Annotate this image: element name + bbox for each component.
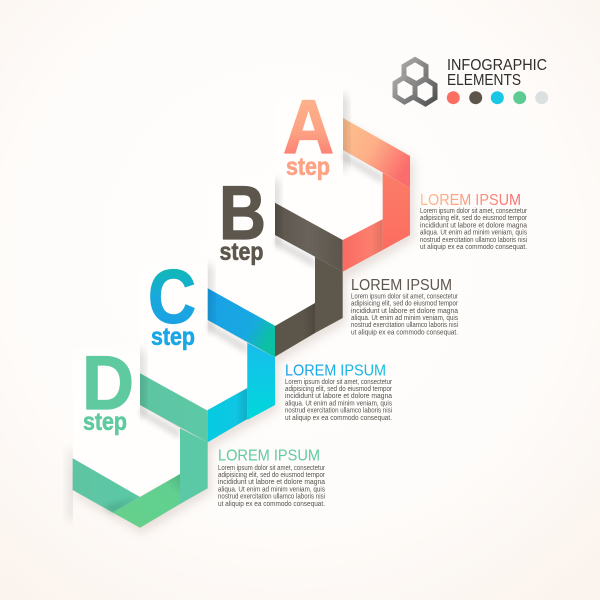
text block A: aliqua. Ut enim ad minim veniam, quis [420, 230, 527, 237]
text block B: incididunt ut labore et dolore magna [351, 308, 458, 315]
letter C with step label: step [151, 323, 195, 351]
text block A [420, 192, 528, 251]
panel: step C [140, 255, 247, 410]
title [447, 57, 547, 89]
band: A right [383, 173, 410, 250]
title: INFOGRAPHIC [447, 57, 547, 74]
fold shadow: D lower left [104, 497, 140, 513]
title: ELEMENTS [447, 72, 521, 89]
text block D: LOREM IPSUM [218, 448, 320, 465]
text block C: nostrud exercitation ullamco laboris nisi [285, 408, 392, 415]
text block D: nostrud exercitation ullamco laboris nisi [218, 494, 325, 501]
text block C: incididunt ut labore et dolore magna [285, 393, 392, 400]
text block D: incididunt ut labore et dolore magna [218, 479, 325, 486]
band: D top [140, 373, 208, 442]
text block B: ut aliquip ex ea commodo consequat. [351, 329, 458, 336]
text block A: LOREM IPSUM [420, 192, 521, 209]
icon: linked hexagons logo [395, 60, 435, 104]
text block D: aliqua. Ut enim ad minim veniam, quis [218, 486, 325, 493]
text block C: adipisicing elit, sed do eiusmod tempor [285, 386, 393, 393]
text block C: aliqua. Ut enim ad minim veniam, quis [285, 400, 392, 407]
ribbon D [73, 373, 208, 528]
panel: step D [73, 340, 180, 497]
band: D front [113, 474, 180, 528]
panel edge shadows [68, 95, 346, 520]
band: B right [315, 257, 343, 333]
ribbon A [343, 118, 410, 272]
band shadows [140, 152, 383, 439]
panel: step B [208, 170, 315, 326]
text block B [351, 277, 459, 336]
text block B: LOREM IPSUM [351, 277, 452, 294]
text block B: adipisicing elit, sed do eiusmod tempor [351, 301, 459, 308]
band: B lower [275, 303, 315, 357]
letter D with step label: step [83, 408, 127, 436]
ribbon C [208, 288, 275, 442]
text block C [285, 362, 393, 422]
panel: step A [275, 85, 383, 240]
text block A: Lorem ipsum dolor sit amet, consectetur [420, 208, 528, 215]
text block A: nostrud exercitation ullamco laboris nisi [420, 237, 527, 244]
text block C: ut aliquip ex ea commodo consequat. [285, 415, 392, 422]
text block A: incididunt ut labore et dolore magna [420, 222, 527, 229]
band: D lower left [73, 458, 140, 513]
letter D with step label: D [82, 341, 134, 426]
band: A lower [343, 219, 383, 272]
text block A: adipisicing elit, sed do eiusmod tempor [420, 215, 528, 222]
letter A with step label: step [286, 153, 330, 181]
band: C lower [208, 388, 247, 442]
text block A: ut aliquip ex ea commodo consequat. [420, 244, 527, 251]
text block D: ut aliquip ex ea commodo consequat. [218, 501, 325, 508]
legend colour dots [447, 91, 548, 104]
letter A with step label: A [283, 85, 334, 170]
text block B: aliqua. Ut enim ad minim veniam, quis [351, 315, 458, 322]
band: D right [180, 428, 208, 504]
band: C top [208, 288, 275, 357]
text block C: Lorem ipsum dolor sit amet, consectetur [285, 379, 393, 386]
fold: B lower [303, 303, 315, 340]
text block C: LOREM IPSUM [285, 362, 386, 379]
band: A top [343, 118, 410, 188]
band: C right [247, 343, 275, 420]
hexagon shadows [76, 124, 414, 533]
band: B top [275, 203, 343, 272]
text block B: nostrud exercitation ullamco laboris nisi [351, 322, 458, 329]
text block D: adipisicing elit, sed do eiusmod tempor [218, 472, 326, 479]
letter C with step label: C [148, 255, 196, 340]
letter B with step label: B [219, 171, 266, 256]
text block B: Lorem ipsum dolor sit amet, consectetur [351, 293, 459, 300]
letter B with step label: step [220, 238, 264, 266]
ribbon B [275, 203, 343, 357]
text block D [218, 448, 326, 508]
text block D: Lorem ipsum dolor sit amet, consectetur [218, 465, 326, 472]
